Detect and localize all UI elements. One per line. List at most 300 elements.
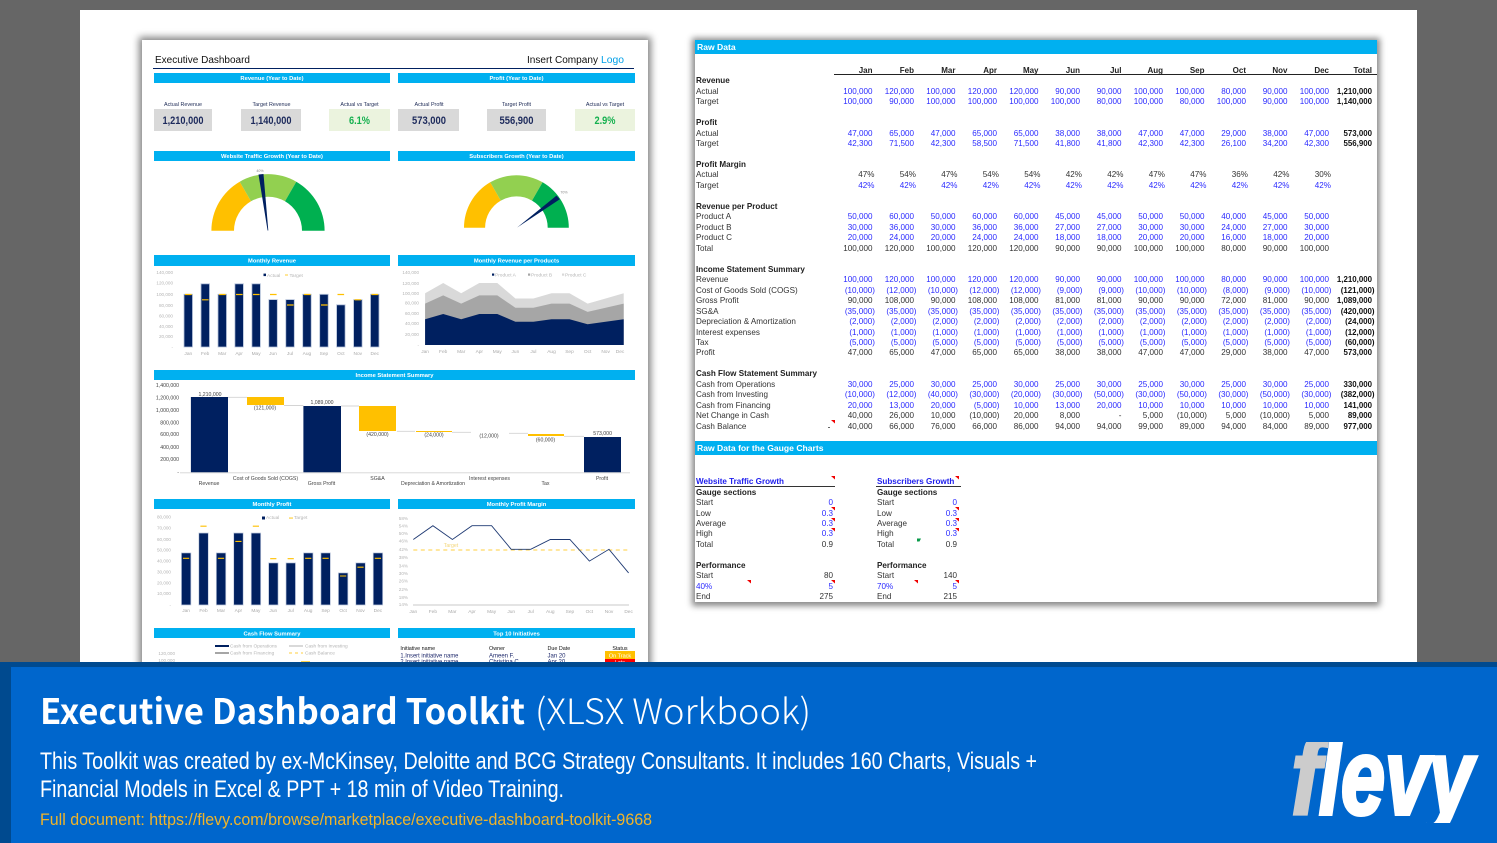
table: profit: 556,900 (1343, 139, 1372, 148)
data labels (198, 392, 612, 444)
table: profit: 573,000 (1343, 129, 1372, 138)
table header: months: Total (1353, 66, 1372, 75)
area: product B (425, 295, 624, 345)
table: income statement summary: 90,000 (1263, 275, 1288, 284)
legend (492, 272, 587, 278)
table: profit margin: 42% (983, 181, 999, 190)
table header: months: Feb (900, 66, 914, 75)
table: income statement summary: (1,000) (1181, 328, 1207, 337)
month labels: Apr (476, 349, 483, 355)
month labels: Aug (304, 608, 313, 614)
table: profit: 65,000 (972, 129, 997, 138)
kpi: target profit: Target Profit (502, 102, 532, 108)
table: income statement summary: (5,000) (1264, 338, 1290, 347)
table: cash flow statement summary: Cash Balance (696, 422, 746, 431)
table: income statement summary: (1,000) (849, 328, 875, 337)
table: top initiatives: Late (615, 660, 625, 666)
table: income statement summary: 38,000 (1263, 348, 1288, 357)
table: revenue: 1,210,000 (1337, 87, 1372, 96)
table: revenue: 100,000 (926, 97, 956, 106)
table: profit: Target (696, 139, 718, 148)
table: cash flow statement summary: 84,000 (1263, 422, 1288, 431)
month labels: Jan (184, 351, 192, 357)
table: revenue per product: 120,000 (1009, 244, 1038, 253)
table: income statement summary: (5,000) (849, 338, 875, 347)
table: profit: 71,500 (889, 139, 914, 148)
table: income statement summary: (9,000) (1057, 286, 1082, 295)
dashboard title row (153, 55, 634, 69)
table: profit margin: 47% (941, 170, 958, 179)
target label: Target (444, 543, 459, 549)
y axis labels: 70,000 (157, 526, 171, 530)
table: income statement summary: Cost of Goods Sold (COGS) (696, 286, 798, 295)
table: revenue per product: Product C (696, 233, 732, 242)
month labels: Oct (586, 609, 594, 615)
table: income statement summary: 29,000 (1221, 348, 1246, 357)
table: profit: 42,300 (931, 139, 956, 148)
month labels: Jul (528, 609, 534, 615)
table: income statement summary: (2,000) (891, 317, 916, 326)
table: cash flow statement summary: 10,000 (1180, 401, 1204, 410)
table: cash flow statement summary: (50,000) (1094, 390, 1124, 399)
table: revenue per product: 20,000 (931, 233, 956, 242)
y axis labels: 1,000,000 (156, 408, 179, 414)
month labels: Apr (235, 608, 243, 614)
target markers (185, 294, 378, 305)
table: revenue per product: 90,000 (1097, 244, 1122, 253)
legend: Actual (266, 515, 279, 521)
table: cash flow statement summary: 25,000 (1138, 380, 1163, 389)
data labels: (12,000) (479, 434, 499, 440)
banner title (40, 684, 811, 735)
month labels (182, 608, 383, 614)
panel heading: website traffic growth: Website Traffic Growth (Year to Date) (221, 154, 323, 160)
y axis labels: 100,000 (402, 291, 419, 296)
table: cash flow statement summary: 25,000 (972, 380, 997, 389)
table: revenue per product: 90,000 (1055, 244, 1080, 253)
table: income statement summary: (2,000) (1223, 317, 1248, 326)
table: revenue per product: 16,000 (1221, 233, 1246, 242)
table: revenue per product: 18,000 (1263, 233, 1288, 242)
table: cash flow statement summary: 94,000 (1055, 422, 1080, 431)
table: revenue: 100,000 (1134, 87, 1163, 96)
table: cash flow statement summary: 10,000 (931, 411, 956, 420)
panel heading: monthly revenue: Monthly Revenue (248, 258, 297, 264)
table: income statement summary: 100,000 (1134, 275, 1163, 284)
table: income statement summary: (2,000) (974, 317, 1000, 326)
table: income statement summary: (5,000) (1057, 338, 1082, 347)
y axis labels: 120,000 (402, 281, 419, 286)
table: cash flow statement summary: (50,000) (1177, 390, 1207, 399)
chart: monthly revenue per product (402, 270, 625, 355)
y axis labels: 10,000 (157, 591, 171, 596)
heading: raw data: Raw Data (697, 42, 736, 52)
table: website traffic gauge data: Start (696, 571, 713, 580)
table: income statement summary: SG&A (696, 307, 718, 316)
actual margin line (413, 526, 629, 573)
table: revenue per product: 50,000 (848, 212, 872, 221)
month labels: May (487, 609, 497, 615)
table: cash flow statement summary: 89,000 (1304, 422, 1329, 431)
table: income statement summary: (1,000) (1264, 328, 1290, 337)
data labels: (60,000) (536, 438, 555, 444)
table: revenue per product: 30,000 (1138, 223, 1163, 232)
table: revenue per product: 27,000 (1097, 223, 1122, 232)
y axis labels (399, 516, 408, 607)
category labels: Tax (541, 481, 550, 487)
table: cash flow statement summary: (20,000) (1011, 390, 1041, 399)
table: income statement summary: (35,000) (1260, 307, 1290, 316)
kpi: revenue actual vs target (329, 102, 390, 131)
table: website traffic gauge data: Performance (696, 561, 745, 570)
y axis labels: 140,000 (156, 270, 173, 275)
legend (264, 273, 303, 279)
table: subscribers gauge data: Performance (877, 561, 926, 570)
table: income statement summary: (1,000) (974, 328, 1000, 337)
legend: Product C (565, 272, 587, 278)
table: cash flow statement summary: 5,000 (1309, 411, 1329, 420)
panel heading: monthly revenue per products: Monthly Revenue per Products (474, 258, 559, 264)
table: revenue: Target (696, 97, 718, 106)
table: revenue: 100,000 (843, 97, 872, 106)
table: top initiatives: Due Date (548, 646, 570, 652)
table: cash flow statement summary: 25,000 (1304, 380, 1329, 389)
table: website traffic gauge data: Start (696, 498, 713, 507)
table: income statement summary: (1,000) (1057, 328, 1082, 337)
month labels: Sep (320, 351, 328, 357)
table: cash flow statement summary: Cash from Financing (696, 401, 771, 410)
table: website traffic gauge data: End (696, 592, 710, 601)
table: revenue: 120,000 (968, 87, 997, 96)
table: income statement summary: 100,000 (926, 275, 956, 284)
table: cash flow statement summary: 20,000 (931, 401, 956, 410)
table: revenue: 90,000 (1055, 87, 1080, 96)
table: income statement summary: (2,000) (1264, 317, 1290, 326)
table: cash flow statement summary: 20,000 (848, 401, 872, 410)
footer banner (0, 662, 1497, 843)
table: profit: 34,200 (1263, 139, 1288, 148)
table: subscribers gauge data: Start (877, 498, 894, 507)
month labels: Jul (530, 349, 536, 355)
y axis labels: 20,000 (157, 580, 171, 586)
table: revenue: 100,000 (1217, 97, 1246, 106)
table: income statement summary: (1,000) (932, 328, 958, 337)
dashboard title row: Logo (601, 55, 624, 66)
table header: months: Dec (1314, 66, 1329, 75)
table: income statement summary: (2,000) (849, 317, 875, 326)
table: website traffic gauge data: 40% (696, 582, 712, 591)
table: subscribers gauge data: 215 (943, 592, 957, 601)
table: income statement summary: 100,000 (843, 275, 872, 284)
y axis labels: 800,000 (160, 420, 179, 426)
month labels: May (493, 349, 502, 355)
y axis labels: 60,000 (405, 311, 419, 316)
table: cash flow statement summary: Net Change in Cash (696, 411, 769, 420)
table: subscribers gauge data: Low (877, 509, 892, 518)
table: income statement summary: 47,000 (931, 348, 956, 357)
month labels: Jun (507, 609, 515, 615)
y axis labels: 80,000 (159, 303, 173, 308)
table: cash flow statement summary: 94,000 (1221, 422, 1246, 431)
table header: months: Jun (1066, 66, 1080, 75)
category labels: SG&A (370, 476, 385, 482)
table: revenue: 90,000 (1097, 87, 1122, 96)
table: cash flow statement summary: Cash from Operations (696, 380, 775, 389)
table: income statement summary: (60,000) (1345, 338, 1374, 347)
table: cash flow statement summary: 10,000 (1263, 401, 1288, 410)
table: cash flow statement summary: 30,000 (1014, 380, 1038, 389)
table: profit margin: 42% (1232, 181, 1248, 190)
y axis labels: 600,000 (160, 432, 179, 438)
table: cash flow statement summary: 40,000 (848, 411, 872, 420)
panel heading: monthly revenue (154, 255, 390, 266)
table: income statement summary: (12,000) (969, 286, 1000, 295)
table: income statement summary: (35,000) (1301, 307, 1332, 316)
table: income statement summary: 108,000 (968, 296, 997, 305)
table: subscribers gauge data: 0.9 (946, 540, 957, 549)
y axis labels: 34% (399, 563, 408, 568)
month labels: Aug (547, 349, 556, 355)
table: profit margin (696, 160, 1331, 190)
table: cash flow statement summary: 99,000 (1138, 422, 1163, 431)
table: revenue: Actual (696, 87, 718, 96)
panel heading: monthly profit (154, 499, 390, 509)
y axis labels: 140,000 (402, 270, 419, 275)
y axis labels: 54% (399, 524, 408, 528)
table: income statement summary: (1,000) (1306, 328, 1332, 337)
table header: months: Nov (1272, 66, 1288, 75)
table: profit: 47,000 (1304, 129, 1329, 138)
chart: cash flow legend and axis: Cash Balance (305, 650, 335, 656)
table header: months: Aug (1147, 66, 1163, 75)
table: revenue per product: 45,000 (1055, 212, 1080, 221)
table: revenue per product: 27,000 (1263, 223, 1288, 232)
table: cash flow statement summary: 10,000 (1221, 401, 1246, 410)
table: website traffic gauge data: 0.9 (822, 540, 833, 549)
table: income statement summary: 81,000 (1263, 296, 1288, 305)
table: cash flow statement summary: (30,000) (1135, 390, 1166, 399)
table header: months: Jul (1110, 66, 1122, 75)
legend: Product B (531, 272, 552, 278)
kpi: target profit (487, 102, 546, 131)
table: income statement summary: (8,000) (1223, 286, 1248, 295)
table: cash flow statement summary: Cash from Investing (696, 390, 768, 399)
table: income statement summary: 120,000 (885, 275, 914, 284)
table: income statement summary: 90,000 (1055, 275, 1080, 284)
table header: months: Mar (941, 66, 956, 75)
table: revenue per product: 60,000 (889, 212, 914, 221)
table: revenue per product: 18,000 (1055, 233, 1080, 242)
chart: monthly profit (157, 514, 383, 614)
table: income statement summary: (121,000) (1341, 286, 1374, 295)
table: profit: 42,300 (1304, 139, 1329, 148)
table: revenue per product: 100,000 (843, 244, 872, 253)
table: cash flow statement summary: 30,000 (931, 380, 956, 389)
table: website traffic gauge data: High (696, 529, 713, 538)
table: cash flow statement summary: 40,000 (848, 422, 872, 431)
table: revenue per product: 100,000 (1134, 244, 1163, 253)
month labels: Jan (421, 349, 429, 355)
table: income statement summary: 120,000 (1009, 275, 1038, 284)
table: revenue per product: 27,000 (1055, 223, 1080, 232)
kpi: target revenue (241, 102, 301, 131)
panel heading: revenue (154, 73, 390, 83)
table: cash flow statement summary: 977,000 (1343, 422, 1372, 431)
table: top initiatives (400, 646, 635, 667)
table: income statement summary: (5,000) (1306, 338, 1332, 347)
table: revenue per product: 60,000 (972, 212, 997, 221)
table: profit: 47,000 (1180, 129, 1204, 138)
banner description (40, 748, 1037, 803)
table: income statement summary: (1,000) (1140, 328, 1166, 337)
y axis labels: 50% (399, 531, 408, 536)
table: income statement summary: 1,210,000 (1337, 275, 1372, 284)
target markers (183, 526, 381, 576)
y axis labels: 58% (399, 516, 408, 521)
table: subscribers gauge data: 0.3 (946, 529, 957, 538)
table: income statement summary: (10,000) (1177, 286, 1207, 295)
table: income statement summary: (10,000) (1135, 286, 1166, 295)
table: revenue: 1,140,000 (1337, 97, 1372, 106)
raw data tables (695, 40, 1377, 601)
y axis labels: 1,200,000 (156, 396, 179, 402)
table: subscribers gauge data: 5 (952, 582, 957, 591)
table: revenue per product: 36,000 (972, 223, 997, 232)
month labels: Jun (512, 349, 520, 355)
table: cash flow statement summary: (30,000) (1301, 390, 1332, 399)
panel heading: revenue: Revenue (Year to Date) (240, 76, 304, 82)
table: subscribers gauge data: Average (877, 519, 907, 528)
table: cash flow statement summary: (10,000) (969, 411, 1000, 420)
table: profit (696, 118, 1372, 148)
table: website traffic gauge data: Low (696, 509, 711, 518)
table: website traffic gauge data: 5 (828, 582, 833, 591)
month labels: Dec (616, 349, 625, 355)
table: profit: 38,000 (1097, 129, 1122, 138)
table: revenue per product: 30,000 (1304, 223, 1329, 232)
y axis labels: 26% (399, 578, 408, 583)
month labels: Feb (199, 608, 208, 614)
month labels: Nov (605, 609, 614, 615)
table: cash flow statement summary: 76,000 (931, 422, 956, 431)
table: profit margin: 42% (941, 181, 958, 190)
table: revenue per product: 50,000 (1304, 212, 1329, 221)
table: income statement summary: Income Statement Summary (696, 265, 805, 274)
table: revenue per product: 24,000 (1221, 223, 1246, 232)
dashboard title row: Insert Company (527, 55, 598, 66)
panel heading: monthly revenue per products (398, 255, 635, 266)
table: profit margin: 42% (1107, 181, 1124, 190)
table: website traffic gauge data: Gauge sections (696, 488, 756, 497)
table: top initiatives: Apr 20 (548, 660, 566, 666)
table: income statement summary: (35,000) (1011, 307, 1041, 316)
table: income statement summary: (10,000) (845, 286, 875, 295)
table: cash flow statement summary: 13,000 (889, 401, 914, 410)
table: website traffic gauge data: 80 (824, 571, 833, 580)
kpi: profit actual vs target (575, 102, 635, 131)
panel heading: subscribers growth (398, 151, 635, 161)
chart: website traffic gauge (211, 169, 325, 231)
category labels: Interest expenses (469, 476, 510, 482)
table: cash flow statement summary: 8,000 (1060, 411, 1080, 420)
month labels: Jul (287, 351, 293, 357)
panel heading: monthly profit margin (398, 499, 635, 509)
table: profit: 47,000 (931, 129, 956, 138)
table: income statement summary: (5,000) (891, 338, 916, 347)
chart: cash flow legend and axis: 120,000 (158, 651, 175, 656)
table: cash flow statement summary: 66,000 (889, 422, 914, 431)
table: subscribers gauge data: Gauge sections (877, 488, 937, 497)
table: profit margin: 54% (983, 170, 999, 179)
table: profit margin: 42% (900, 181, 916, 190)
table: cash flow statement summary: 30,000 (1180, 380, 1204, 389)
table: profit margin: Profit Margin (696, 160, 746, 169)
month labels: Dec (374, 608, 383, 614)
area: product A (425, 314, 624, 345)
panel heading: subscribers growth: Subscribers Growth (Year to Date) (469, 154, 564, 160)
panel heading: income statement summary (154, 370, 635, 380)
kpi: actual profit: Actual Profit (414, 102, 444, 108)
table: revenue: 80,000 (1097, 97, 1122, 106)
table: cash flow statement summary: (40,000) (928, 390, 958, 399)
table: profit margin: 42% (1066, 170, 1082, 179)
table: revenue per product: 30,000 (931, 223, 956, 232)
chart: cash flow legend and axis: 100,000 (158, 658, 175, 663)
table: income statement summary: (5,000) (1181, 338, 1207, 347)
actual bars (184, 284, 379, 347)
table: revenue per product: 18,000 (1097, 233, 1122, 242)
table: income statement summary: (10,000) (1301, 286, 1332, 295)
chart: cash flow legend and axis: Cash from Investing (305, 644, 348, 650)
y axis labels: - (417, 342, 419, 348)
table: income statement summary: (5,000) (1140, 338, 1166, 347)
table: subscribers gauge data: 140 (943, 571, 957, 580)
table: revenue per product: 20,000 (848, 233, 872, 242)
table: income statement summary: 100,000 (1175, 275, 1204, 284)
table: cash flow statement summary: (30,000) (1218, 390, 1248, 399)
table: revenue per product: 100,000 (1175, 244, 1204, 253)
table header: months: May (1023, 66, 1038, 75)
table header: months: Apr (983, 66, 997, 75)
y axis labels: 40,000 (405, 321, 419, 326)
table: profit: 42,300 (1138, 139, 1163, 148)
y axis labels: 20,000 (405, 332, 419, 337)
kpi: actual revenue: 1,210,000 (162, 115, 204, 127)
table: website traffic gauge data: 275 (819, 592, 833, 601)
table: income statement summary: 47,000 (1180, 348, 1204, 357)
y axis labels: 14% (399, 602, 408, 607)
chart: cash flow legend and axis: Cash from Operations (230, 644, 278, 650)
legend (262, 515, 308, 521)
table: revenue: 90,000 (889, 97, 914, 106)
table: website traffic gauge data: 0.3 (822, 519, 833, 528)
table: subscribers gauge data: 0.3 (946, 509, 957, 518)
panel heading: top 10 initiatives: Top 10 Initiatives (493, 631, 540, 637)
kpi: target revenue: Target Revenue (252, 102, 291, 108)
data labels: (121,000) (254, 406, 276, 412)
table: profit margin: 42% (1315, 181, 1331, 190)
month labels: Sep (565, 349, 574, 355)
table: cash flow statement summary: 141,000 (1343, 401, 1372, 410)
table: income statement summary: (35,000) (886, 307, 916, 316)
panel heading: website traffic growth (154, 151, 390, 161)
table: profit: 29,000 (1221, 129, 1246, 138)
table: income statement summary: 65,000 (1014, 348, 1038, 357)
table: income statement summary: 81,000 (1055, 296, 1080, 305)
chart: subscribers gauge (464, 175, 569, 228)
table: top initiatives: Jan 20 (548, 653, 566, 659)
table: cash flow statement summary: 330,000 (1343, 380, 1372, 389)
